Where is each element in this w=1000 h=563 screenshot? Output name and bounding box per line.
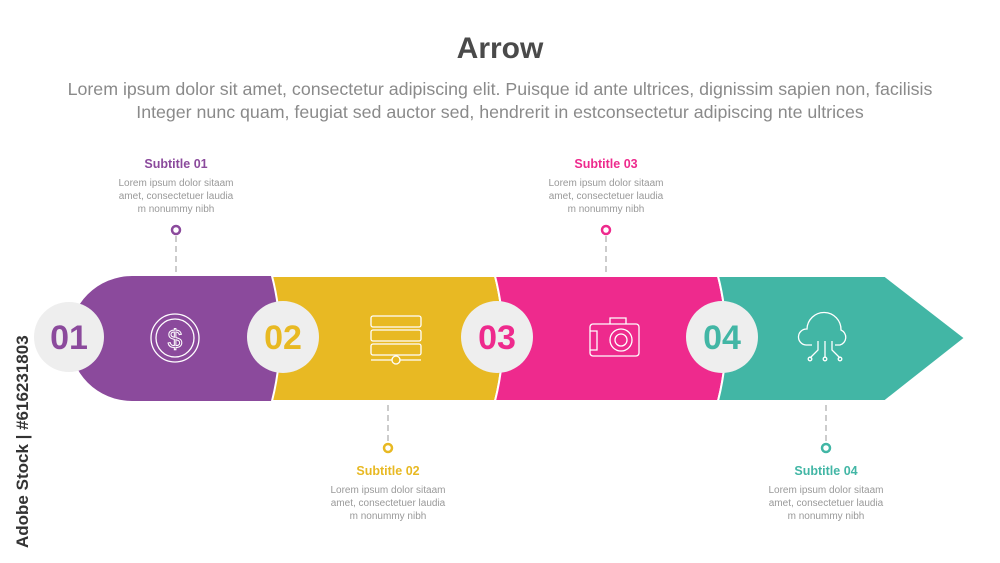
subtitle texts: Subtitle 03 xyxy=(574,157,638,171)
subtitle texts: Lorem ipsum dolor sitaam xyxy=(118,178,234,189)
subtitle texts: m nonummy nibh xyxy=(568,204,644,215)
subtitle texts: Lorem ipsum dolor sitaam xyxy=(548,178,664,189)
icon: camera xyxy=(590,318,639,356)
segment 2 yellow xyxy=(272,276,503,401)
subtitle texts: m nonummy nibh xyxy=(350,511,426,522)
subtitle texts: Subtitle 04 xyxy=(794,464,858,478)
segment 3 pink xyxy=(495,276,726,401)
subtitle texts: m nonummy nibh xyxy=(788,511,864,522)
subtitle texts: m nonummy nibh xyxy=(138,204,214,215)
subtitle texts: Subtitle 01 xyxy=(144,157,208,171)
numbers: 03 xyxy=(478,319,516,357)
subtitle texts xyxy=(118,157,884,522)
numbers: 02 xyxy=(264,319,302,357)
title: Arrow xyxy=(457,32,544,65)
text: $ xyxy=(168,324,183,354)
numbers: 04 xyxy=(703,319,741,357)
numbers: 01 xyxy=(50,319,88,357)
segment 4 teal arrow xyxy=(718,276,965,401)
description: Integer nunc quam, feugiat sed auctor sed, hendrerit in estconsectetur adipiscing nte ultrices xyxy=(136,102,864,122)
number circles xyxy=(34,301,758,373)
icon: cloud xyxy=(798,313,846,361)
numbers xyxy=(50,319,741,357)
description xyxy=(68,79,932,122)
subtitle texts: Subtitle 02 xyxy=(356,464,420,478)
subtitle texts: amet, consectetuer laudia xyxy=(119,191,234,202)
subtitle texts: amet, consectetuer laudia xyxy=(549,191,664,202)
description: Lorem ipsum dolor sit amet, consectetur adipiscing elit. Puisque id ante ultrices, dignissim sapien non, facilisis xyxy=(68,79,932,99)
subtitle texts: Lorem ipsum dolor sitaam xyxy=(330,485,446,496)
icon: server xyxy=(371,316,421,364)
side watermark text: Adobe Stock | #616231803 xyxy=(13,335,32,548)
segment 1 purple xyxy=(70,276,280,401)
subtitle texts: amet, consectetuer laudia xyxy=(331,498,446,509)
pins xyxy=(176,236,826,442)
subtitle texts: amet, consectetuer laudia xyxy=(769,498,884,509)
subtitle texts: Lorem ipsum dolor sitaam xyxy=(768,485,884,496)
icon: dollar xyxy=(151,314,199,362)
